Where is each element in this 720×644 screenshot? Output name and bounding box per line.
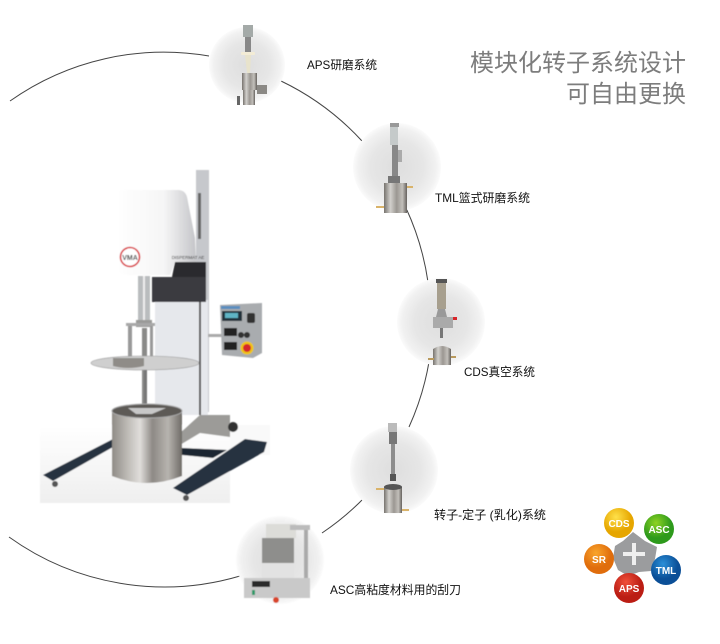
title xyxy=(470,50,686,108)
badge TML: TML xyxy=(656,566,676,577)
module: APS grinding xyxy=(209,25,285,105)
module: TML basket xyxy=(353,123,441,213)
main machine photo: DISPERMAT AE xyxy=(172,255,204,260)
module: ASC scraper xyxy=(236,516,324,604)
title: 模块化转子系统设计 xyxy=(470,50,686,77)
label: CDS: CDS真空系统 xyxy=(464,365,535,379)
badge APS: APS xyxy=(619,584,640,595)
main machine photo: VMA xyxy=(122,255,138,262)
label: rotor-stator: 转子-定子 (乳化)系统 xyxy=(434,507,546,522)
module: CDS vacuum xyxy=(397,278,485,366)
label: APS: APS研磨系统 xyxy=(307,58,377,72)
main machine photo xyxy=(40,170,270,503)
title: 可自由更换 xyxy=(566,81,686,108)
label: TML: TML篮式研磨系统 xyxy=(435,190,530,205)
module: rotor-stator xyxy=(350,423,438,514)
badge ASC: ASC xyxy=(648,525,670,536)
connecting circle arc xyxy=(9,52,429,587)
label: ASC: ASC高粘度材料用的刮刀 xyxy=(330,582,461,597)
badge SR: SR xyxy=(592,555,607,566)
badge CDS: CDS xyxy=(608,519,630,530)
modular rotor badge xyxy=(584,508,681,603)
